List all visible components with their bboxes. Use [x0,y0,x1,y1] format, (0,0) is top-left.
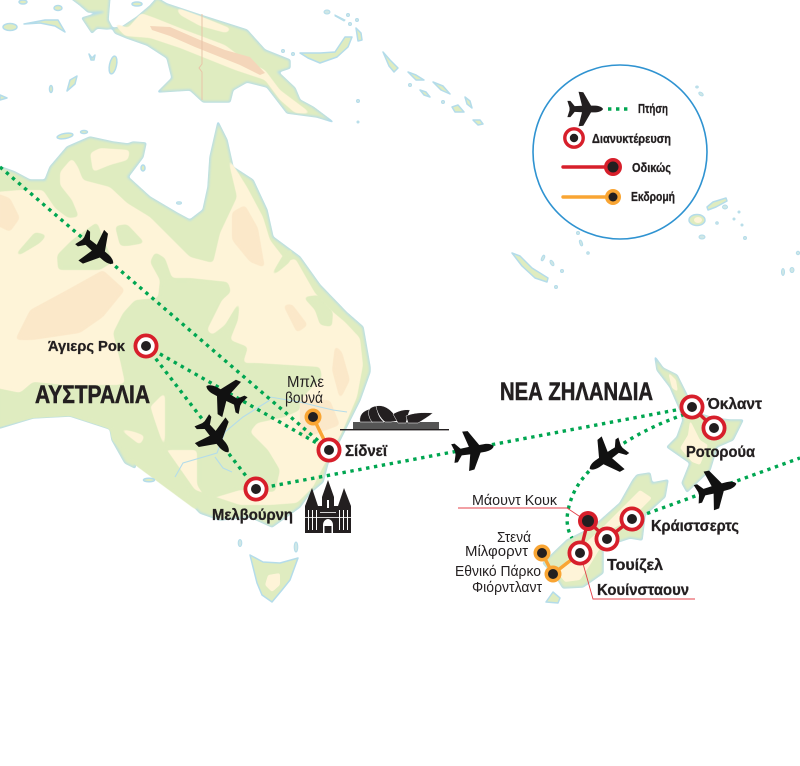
label: Milford Sound: Μίλφορντ [465,543,528,560]
marker: Twizel [596,528,618,550]
label: Blue Mountains: Μπλε [287,374,324,391]
marker: Auckland [681,396,703,418]
marker: Christchurch [621,508,643,530]
map: Pacific islands [512,86,800,288]
marker: Blue Mountains [304,408,322,426]
icon: plane Melbourne to Auckland [449,427,497,473]
marker: Melbourne [245,478,267,500]
label: Mount Cook: Μάουντ Κουκ [472,492,557,509]
legend: excursion [563,189,675,205]
icon: plane leaving Christchurch [691,464,741,514]
marker: Queenstown [569,542,591,564]
label: Christchurch: Κράιστσερτς [651,518,739,535]
label: Auckland: Όκλαντ [706,396,762,413]
legend: overnight stay: Διανυκτέρευση [592,132,671,146]
callout lines [458,508,695,599]
legend: overnight stay [565,129,671,147]
legend: excursion: Εκδρομή [631,190,675,204]
label: Ayers Rock: Άγιερς Ροκ [48,338,126,355]
marker: Milford Sound [534,544,550,562]
legend: by road [563,158,671,176]
label: Queenstown: Κουίνσταουν [597,582,689,599]
road routes [580,407,714,553]
label: Sydney: Σίδνεϊ [345,443,388,460]
icon: plane Auckland to Queenstown [578,429,635,485]
label: Twizel: Τουίζελ [607,557,663,574]
label: Milford Sound: Στενά [497,529,531,546]
marker: Mount Cook [578,511,598,531]
flight routes [0,167,800,538]
marker: Ayers Rock [135,335,157,357]
icon: plane Ayers Rock to Melbourne [187,407,244,465]
legend [533,65,707,239]
icon: plane Ayers Rock to Sydney [197,368,252,423]
map: New Zealand [543,357,743,603]
label: Fiordland National Park: Φιόρντλαντ [472,579,542,596]
legend: by road: Οδικώς [632,161,671,175]
legend: flight [567,92,668,126]
map: New Guinea and northern islands [0,0,483,125]
label: Blue Mountains: βουνά [285,390,323,407]
excursion routes [313,417,580,574]
label: Rotorua: Ροτορούα [686,444,755,461]
marker: Rotorua [703,417,725,439]
icon: Melbourne cathedral [305,480,351,533]
icon: plane over central Australia [68,222,126,279]
legend: flight: Πτήση [638,102,668,116]
heading: Australia: ΑΥΣΤΡΑΛΙΑ [35,381,150,409]
map: Australia [0,122,370,602]
icon: Sydney Opera House [340,406,449,430]
label: Fiordland National Park: Εθνικό Πάρκο [455,563,541,580]
marker: Sydney [318,439,340,461]
heading: New Zealand: ΝΕΑ ΖΗΛΑΝΔΙΑ [500,378,653,406]
label: Melbourne: Μελβούρνη [212,507,293,524]
marker: Fiordland [544,566,562,582]
